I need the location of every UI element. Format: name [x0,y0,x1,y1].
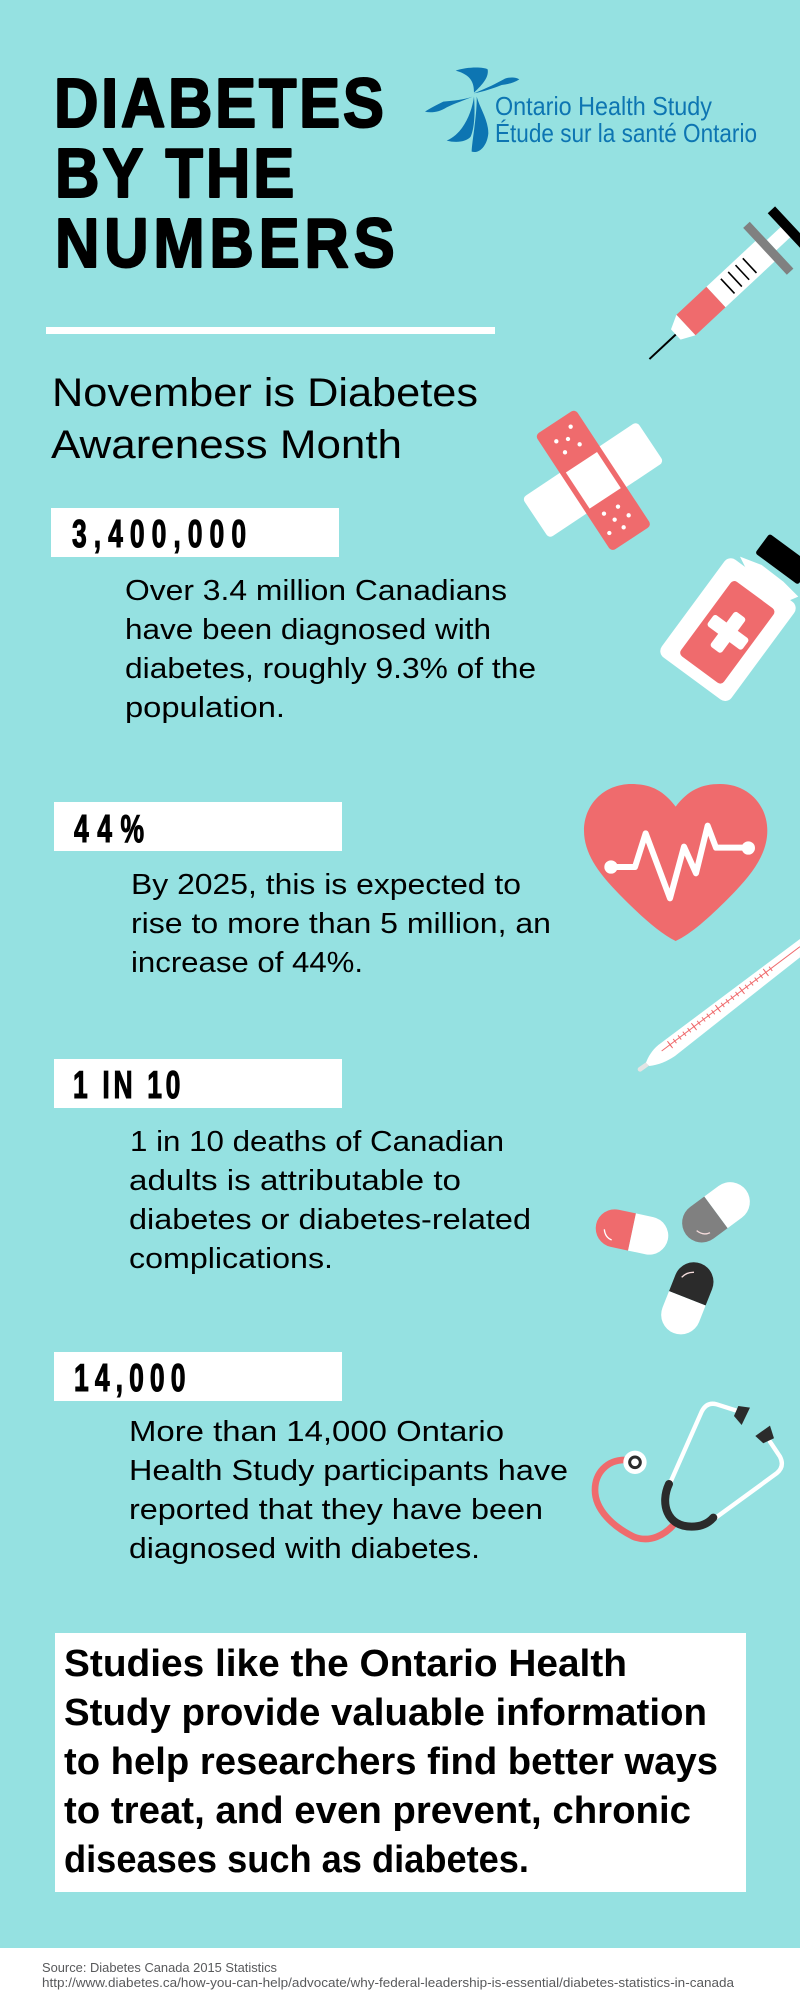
stat 4: 14,000: More than 14,000 Ontario [129,1416,504,1448]
logo: Ontario Health Study [425,67,757,152]
footer: source [0,1948,800,2000]
title: NUMBERS [55,203,395,282]
title [54,63,395,282]
stat 3: 1 in 10: 1 IN 10 [73,1064,180,1107]
stat 3: 1 in 10: adults is attributable to [129,1165,461,1197]
stat 4: 14,000: diagnosed with diabetes. [129,1533,480,1565]
icon: pills [592,1174,758,1340]
subtitle [51,371,478,467]
panel: closing statement: to help researchers find better ways [64,1741,718,1783]
icon: syringe [628,202,800,382]
panel: closing statement: Studies like the Ontario Health [64,1643,627,1685]
stat 2: 44%: rise to more than 5 million, an [131,908,551,940]
stat 1: 3,400,000: population. [125,692,285,724]
stat 2: 44%: 44% [74,808,144,851]
stat 4: 14,000: Health Study participants have [129,1455,568,1487]
stat 3: 1 in 10: complications. [129,1243,333,1275]
stat 1: 3,400,000 [51,508,536,724]
logo: Ontario Health Study: Étude sur la santé Ontario [495,118,757,148]
stat 1: 3,400,000: 3,400,000 [72,513,246,556]
icon: thermometer [640,939,800,1069]
stat 2: 44%: increase of 44%. [131,947,363,979]
icon: heart with pulse [584,784,767,941]
stat 2: 44%: By 2025, this is expected to [131,869,521,901]
subtitle: Awareness Month [51,423,402,467]
footer: source: http://www.diabetes.ca/how-you-can-help/advocate/why-federal-leadership-is-essential/diabetes-statistics-in-canada [42,1975,735,1990]
stat 3: 1 in 10: diabetes or diabetes-related [129,1204,531,1236]
stat 3: 1 in 10 [54,1059,531,1275]
panel: closing statement: diseases such as diabetes. [64,1839,529,1881]
stat 4: 14,000: reported that they have been [129,1494,543,1526]
icon: bandage [522,409,664,552]
stat 4: 14,000: 14,000 [74,1357,186,1400]
title: BY THE [55,133,294,212]
stat 4: 14,000 [54,1352,568,1565]
icon: medicine bottle [657,534,800,704]
stat 2: 44% [54,802,551,979]
panel: closing statement: Study provide valuable information [64,1692,707,1734]
divider [46,327,495,334]
stat 1: 3,400,000: diabetes, roughly 9.3% of the [125,653,536,685]
icon: stethoscope [595,1404,782,1539]
subtitle: November is Diabetes [52,371,478,415]
stat 1: 3,400,000: Over 3.4 million Canadians [125,575,507,607]
panel: closing statement: to treat, and even prevent, chronic [64,1790,691,1832]
logo: Ontario Health Study: Ontario Health Study [495,91,712,121]
stat 3: 1 in 10: 1 in 10 deaths of Canadian [130,1126,504,1158]
footer: source: Source: Diabetes Canada 2015 Statistics [42,1960,277,1975]
stat 1: 3,400,000: have been diagnosed with [125,614,491,646]
panel: closing statement [55,1633,746,1892]
title: DIABETES [54,63,384,142]
